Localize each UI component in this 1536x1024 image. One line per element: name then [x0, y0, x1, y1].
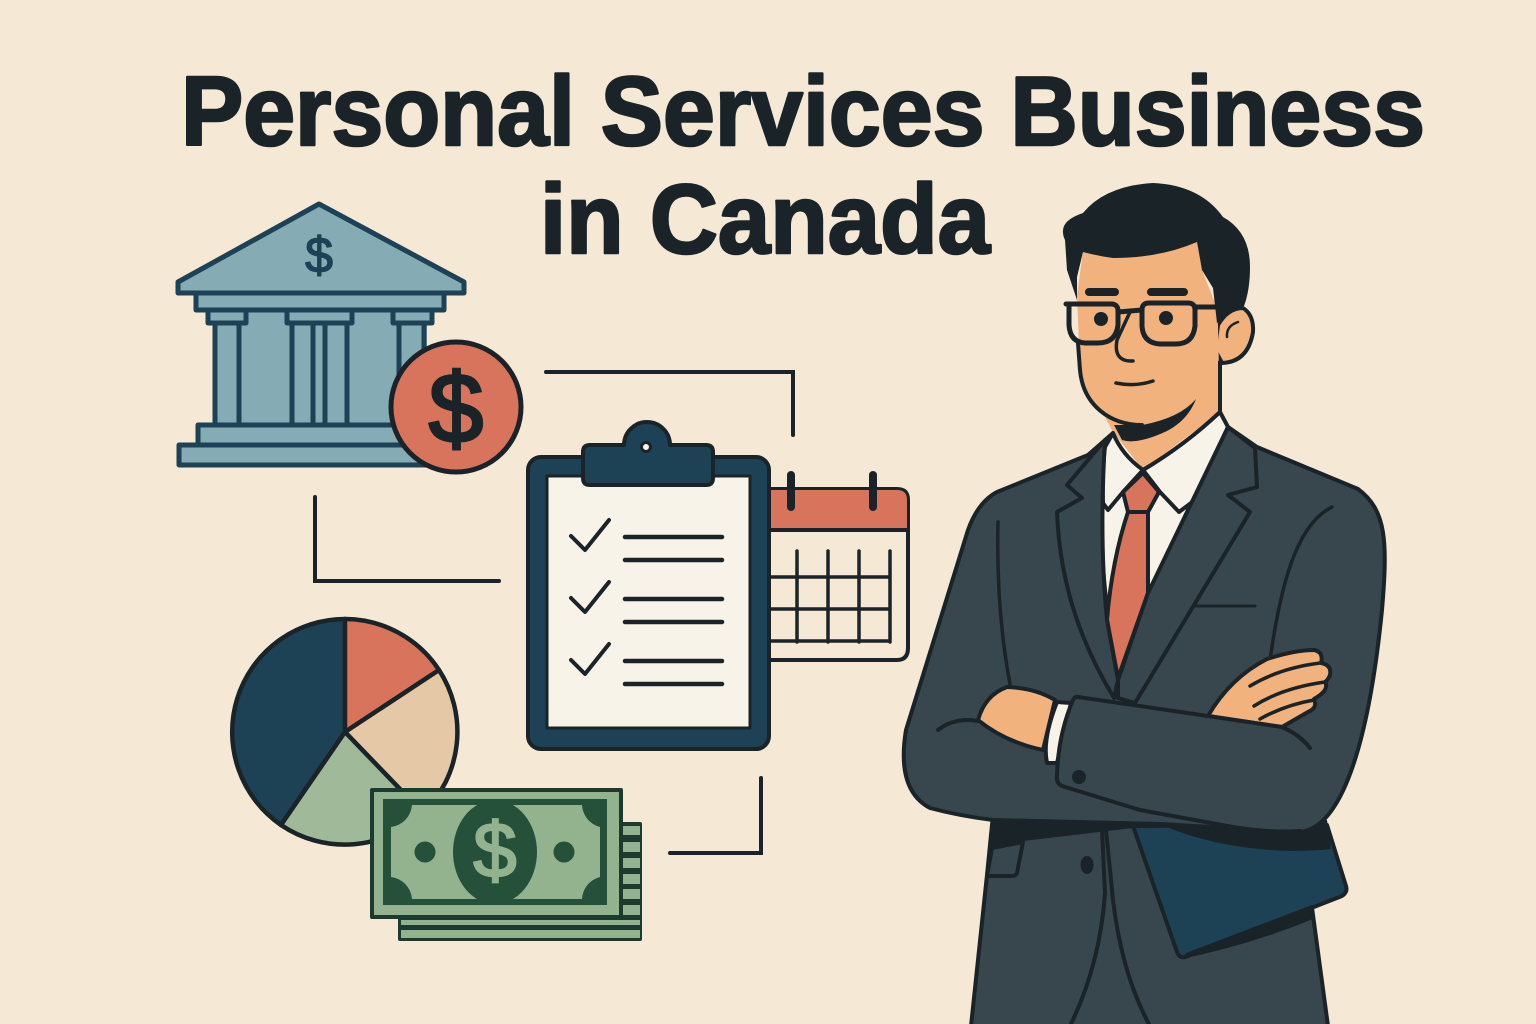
pocket flap [987, 842, 1023, 876]
left hand [978, 687, 1055, 750]
forearm sleeve [1057, 697, 1330, 832]
elbow crease [938, 720, 978, 730]
connector line: bank to clipboard [315, 497, 499, 581]
underarm shadow [1140, 808, 1331, 851]
face [1077, 242, 1219, 425]
necktie [1107, 473, 1159, 678]
pie chart [232, 619, 457, 845]
finger lines [1250, 663, 1325, 719]
eyes [1094, 311, 1173, 326]
ear [1215, 308, 1253, 363]
breast pocket [1193, 604, 1255, 608]
hair [1063, 183, 1250, 323]
shirt [1102, 412, 1228, 610]
right hand [1208, 650, 1330, 727]
infographic canvas [176, 72, 1422, 1024]
glasses [1066, 303, 1215, 344]
title: in Canada [540, 164, 991, 274]
shirt cuff [1046, 702, 1071, 763]
mouth [1116, 381, 1153, 385]
title [181, 56, 1425, 274]
nose [1116, 312, 1133, 361]
checklist ticks [571, 520, 609, 674]
jacket button [1080, 856, 1094, 874]
jacket front split [1070, 830, 1150, 1024]
left lapel [1057, 440, 1118, 698]
checklist lines [625, 537, 722, 684]
shirt collar [1103, 412, 1228, 512]
arm seams [998, 507, 1332, 684]
icon: clipboard checklist [528, 422, 769, 749]
icon: stack of banknotes: $ [473, 806, 517, 894]
icon: dollar coin [391, 342, 521, 472]
chin shadow [1114, 399, 1196, 441]
right lapel [1118, 427, 1257, 703]
tablet folder [1133, 825, 1346, 957]
eyebrows [1089, 288, 1184, 296]
connector line: money to clipboard [670, 778, 761, 853]
cuff button [1072, 770, 1086, 784]
jacket lower body [971, 815, 1328, 1024]
neck [1080, 362, 1220, 470]
jacket upper and arms [904, 427, 1385, 832]
businessman figure [904, 183, 1385, 1024]
icon: calendar [765, 475, 908, 660]
icon: bank building [178, 204, 464, 465]
icon: dollar coin: $ [429, 353, 483, 463]
title: Personal Services Business [181, 56, 1425, 166]
back notes [398, 822, 642, 941]
icon: bank building: $ [305, 227, 333, 283]
connector line: bank to calendar [546, 372, 793, 435]
front note [372, 790, 621, 917]
waist shadow [991, 815, 1160, 848]
ear inner line [1227, 322, 1238, 337]
icon: stack of banknotes [372, 790, 642, 941]
tablet shadow [1181, 905, 1313, 959]
